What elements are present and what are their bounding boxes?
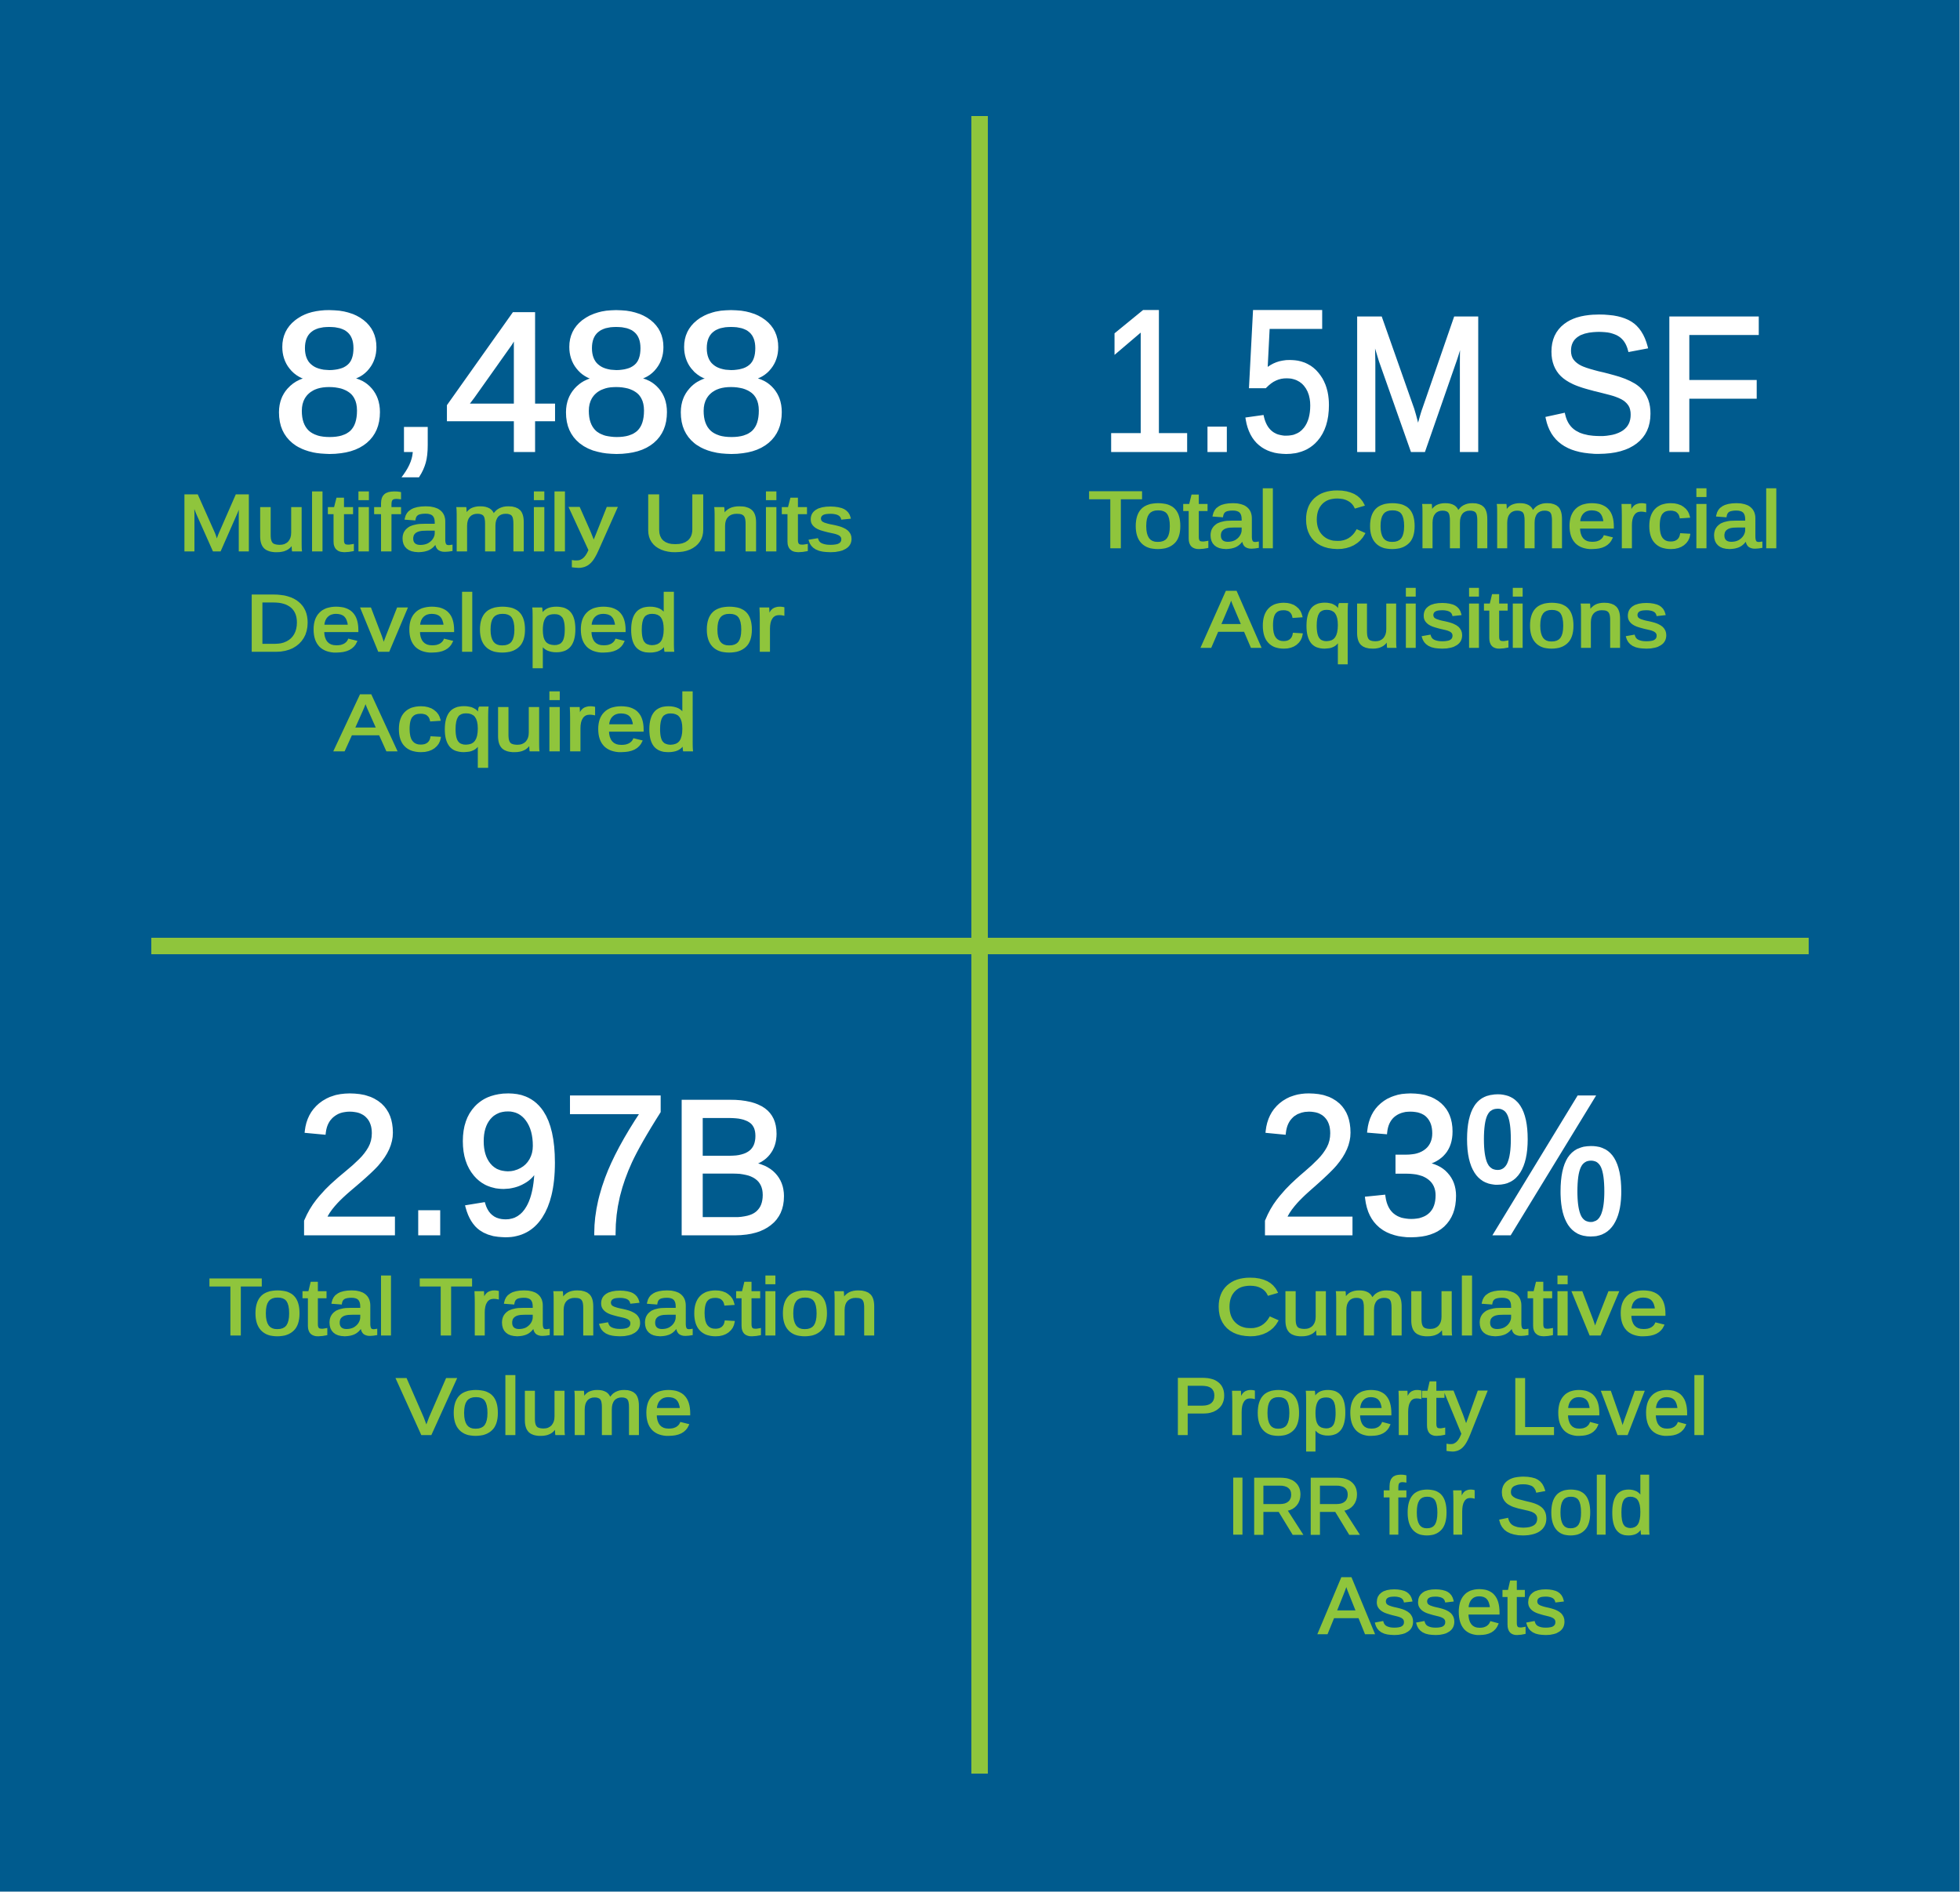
label: Cumulative Property Level IRR for Sold Assets: Cumulative	[1215, 1262, 1668, 1352]
label: Multifamily Units Developed or Acquired: Multifamily Units	[178, 478, 854, 568]
panel: transaction volume	[209, 1055, 879, 1451]
label: Cumulative Property Level IRR for Sold Assets: Property Level	[1172, 1362, 1708, 1451]
label: Total Commercial Acquisitions	[1088, 475, 1781, 664]
label: Cumulative Property Level IRR for Sold Assets: IRR for Sold	[1227, 1462, 1653, 1551]
label: Cumulative Property Level IRR for Sold Assets: Assets	[1319, 1561, 1566, 1651]
label: Total Commercial Acquisitions: Total Commercial	[1088, 475, 1781, 565]
divider: vertical line	[971, 116, 988, 1774]
label: Total Transaction Volume: Volume	[397, 1362, 693, 1451]
stat: 1.5M SF: M SF	[1345, 277, 1764, 491]
label: Multifamily Units Developed or Acquired: Acquired	[335, 678, 698, 768]
stat: 8,488: 8,488	[272, 272, 789, 492]
label: Total Transaction Volume	[209, 1262, 879, 1451]
stat: 23%: 23%	[1258, 1055, 1626, 1276]
label: Multifamily Units Developed or Acquired	[178, 478, 854, 768]
panel: multifamily units	[178, 272, 854, 768]
stat: 1.5M SF	[1100, 269, 1764, 493]
stat: 2.97B: 2.97B	[296, 1055, 792, 1276]
stat: 1.5M SF: 1.5	[1100, 269, 1334, 493]
label: Multifamily Units Developed or Acquired: Developed or	[245, 579, 785, 668]
panel: commercial acquisitions	[1088, 269, 1781, 664]
label: Total Transaction Volume: Total Transaction	[209, 1262, 879, 1352]
divider: horizontal line	[151, 938, 1809, 954]
label: Cumulative Property Level IRR for Sold Assets	[1172, 1262, 1708, 1651]
panel: cumulative IRR	[1172, 1055, 1708, 1651]
label: Total Commercial Acquisitions: Acquisitions	[1202, 575, 1668, 664]
